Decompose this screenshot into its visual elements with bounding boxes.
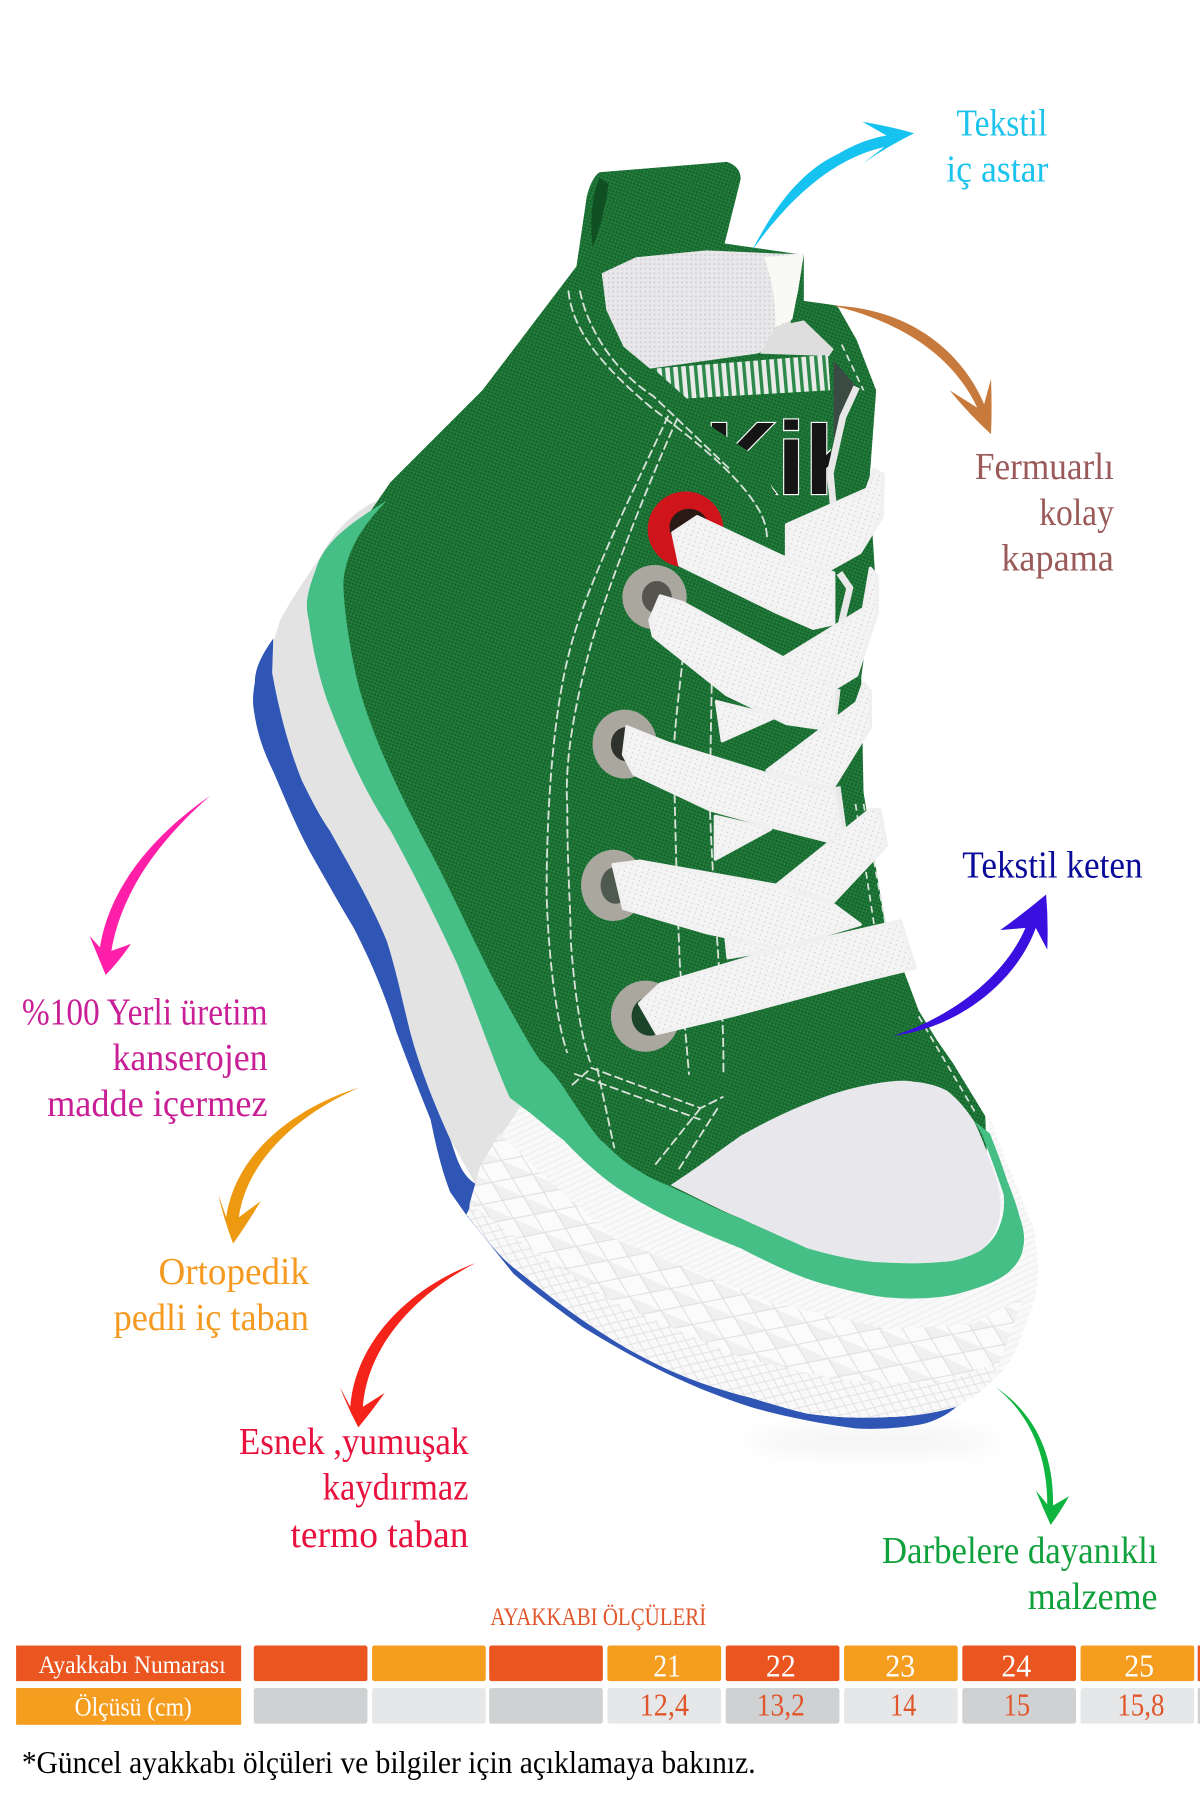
tongue: [687, 390, 831, 519]
callout: textile canvas: [893, 844, 1143, 1036]
label: local production: [22, 991, 268, 1125]
ground shadow: [746, 1430, 999, 1453]
row: shoe numbers: Ayakkabı Numarası: [38, 1651, 226, 1679]
inner gusset: [834, 361, 857, 450]
bumper diamond band: [470, 1133, 1023, 1384]
eyelet: silver 3: [581, 850, 645, 921]
label: orthopedic insole: Ortopedik: [158, 1251, 309, 1293]
eyelet: silver 4: [611, 981, 680, 1052]
mint green stripe: [307, 501, 1024, 1299]
label: zipper: kapama: [1001, 538, 1114, 580]
white laces: [613, 470, 915, 1033]
row: shoe numbers: 21: [653, 1648, 681, 1684]
callout: textile lining: [752, 103, 1049, 250]
lining highlight: [764, 254, 804, 327]
label: textile lining: Tekstil: [957, 103, 1047, 145]
footnote: *Güncel ayakkabı ölçüleri ve bilgiler için açıklamaya bakınız.: [22, 1744, 756, 1780]
arrow: green: [996, 1387, 1069, 1525]
label: flexible sole: Esnek ,yumuşak: [239, 1421, 469, 1463]
label: local production: madde içermez: [47, 1083, 268, 1125]
green canvas upper: [327, 162, 990, 1234]
row: centimetres: 12,4: [640, 1687, 689, 1723]
label: zipper: [975, 446, 1114, 580]
size table heading: AYAKKABI ÖLÇÜLERİ: [490, 1603, 706, 1631]
inner mesh lining: [602, 250, 804, 369]
row: centimetres: 15: [1004, 1687, 1030, 1723]
label: zipper: kolay: [1039, 492, 1114, 534]
callout: flexible sole: [239, 1263, 475, 1556]
label: textile canvas: Tekstil keten: [962, 844, 1143, 886]
row: centimetres: 13,2: [757, 1687, 805, 1723]
label: impact resistant: [882, 1530, 1158, 1618]
tongue logo: KiK: [705, 400, 877, 516]
eyestay flap: [574, 347, 787, 689]
label: zipper: Fermuarlı: [975, 446, 1114, 488]
label: impact resistant: Darbelere dayanıklı: [882, 1530, 1158, 1572]
zipper pull: [760, 320, 834, 356]
row: shoe numbers: [16, 1646, 1200, 1684]
blue outsole: [253, 638, 957, 1429]
label: orthopedic insole: [114, 1251, 309, 1339]
eyelet: silver 1: [622, 565, 687, 629]
callout: orthopedic insole: [114, 1087, 359, 1339]
row: shoe numbers: 24: [1001, 1648, 1031, 1684]
label: impact resistant: malzeme: [1028, 1576, 1158, 1618]
fringed collar edge: [653, 355, 830, 398]
arrow: cyan: [752, 122, 914, 250]
row: shoe numbers: 25: [1124, 1648, 1154, 1684]
arrow: orange: [218, 1087, 359, 1244]
row: centimetres: 15,8: [1117, 1687, 1164, 1723]
label: textile lining: [946, 103, 1049, 190]
label: textile lining: iç astar: [946, 148, 1049, 190]
label: flexible sole: kaydırmaz: [323, 1467, 469, 1509]
callout: zipper: [833, 305, 1114, 580]
eyelet: red: [648, 491, 723, 567]
arrow: brown: [833, 305, 992, 434]
arrow: red: [340, 1263, 475, 1427]
label: local production: %100 Yerli üretim: [22, 991, 268, 1033]
eyelet: silver 2: [593, 710, 657, 779]
grey midsole band: [272, 496, 528, 1194]
label: local production: kanserojen: [113, 1037, 268, 1079]
label: flexible sole: [239, 1421, 469, 1556]
pull tab crease: [591, 178, 609, 247]
arrow: blue: [893, 895, 1048, 1036]
row: shoe numbers: 22: [766, 1648, 796, 1684]
size table: [16, 1646, 1200, 1725]
label: orthopedic insole: pedli iç taban: [114, 1297, 309, 1339]
white stitching: [547, 291, 767, 1171]
callout: local production: [22, 796, 268, 1125]
row: centimetres: [16, 1687, 1200, 1725]
arrow: magenta: [90, 796, 210, 975]
shoe illustration: [253, 162, 1038, 1453]
row: centimetres: 14: [890, 1687, 916, 1723]
frayed gusset edges: [830, 387, 857, 837]
bumper lower grid: [469, 1203, 1000, 1418]
toe bumper: [469, 1107, 1038, 1418]
row: centimetres: Ölçüsü (cm): [75, 1692, 192, 1722]
right side stitching: [842, 344, 976, 1114]
row: shoe numbers: 23: [885, 1648, 915, 1684]
label: flexible sole: termo taban: [291, 1514, 469, 1556]
toe cap: [671, 1081, 1001, 1263]
callout: impact resistant: [882, 1387, 1158, 1618]
